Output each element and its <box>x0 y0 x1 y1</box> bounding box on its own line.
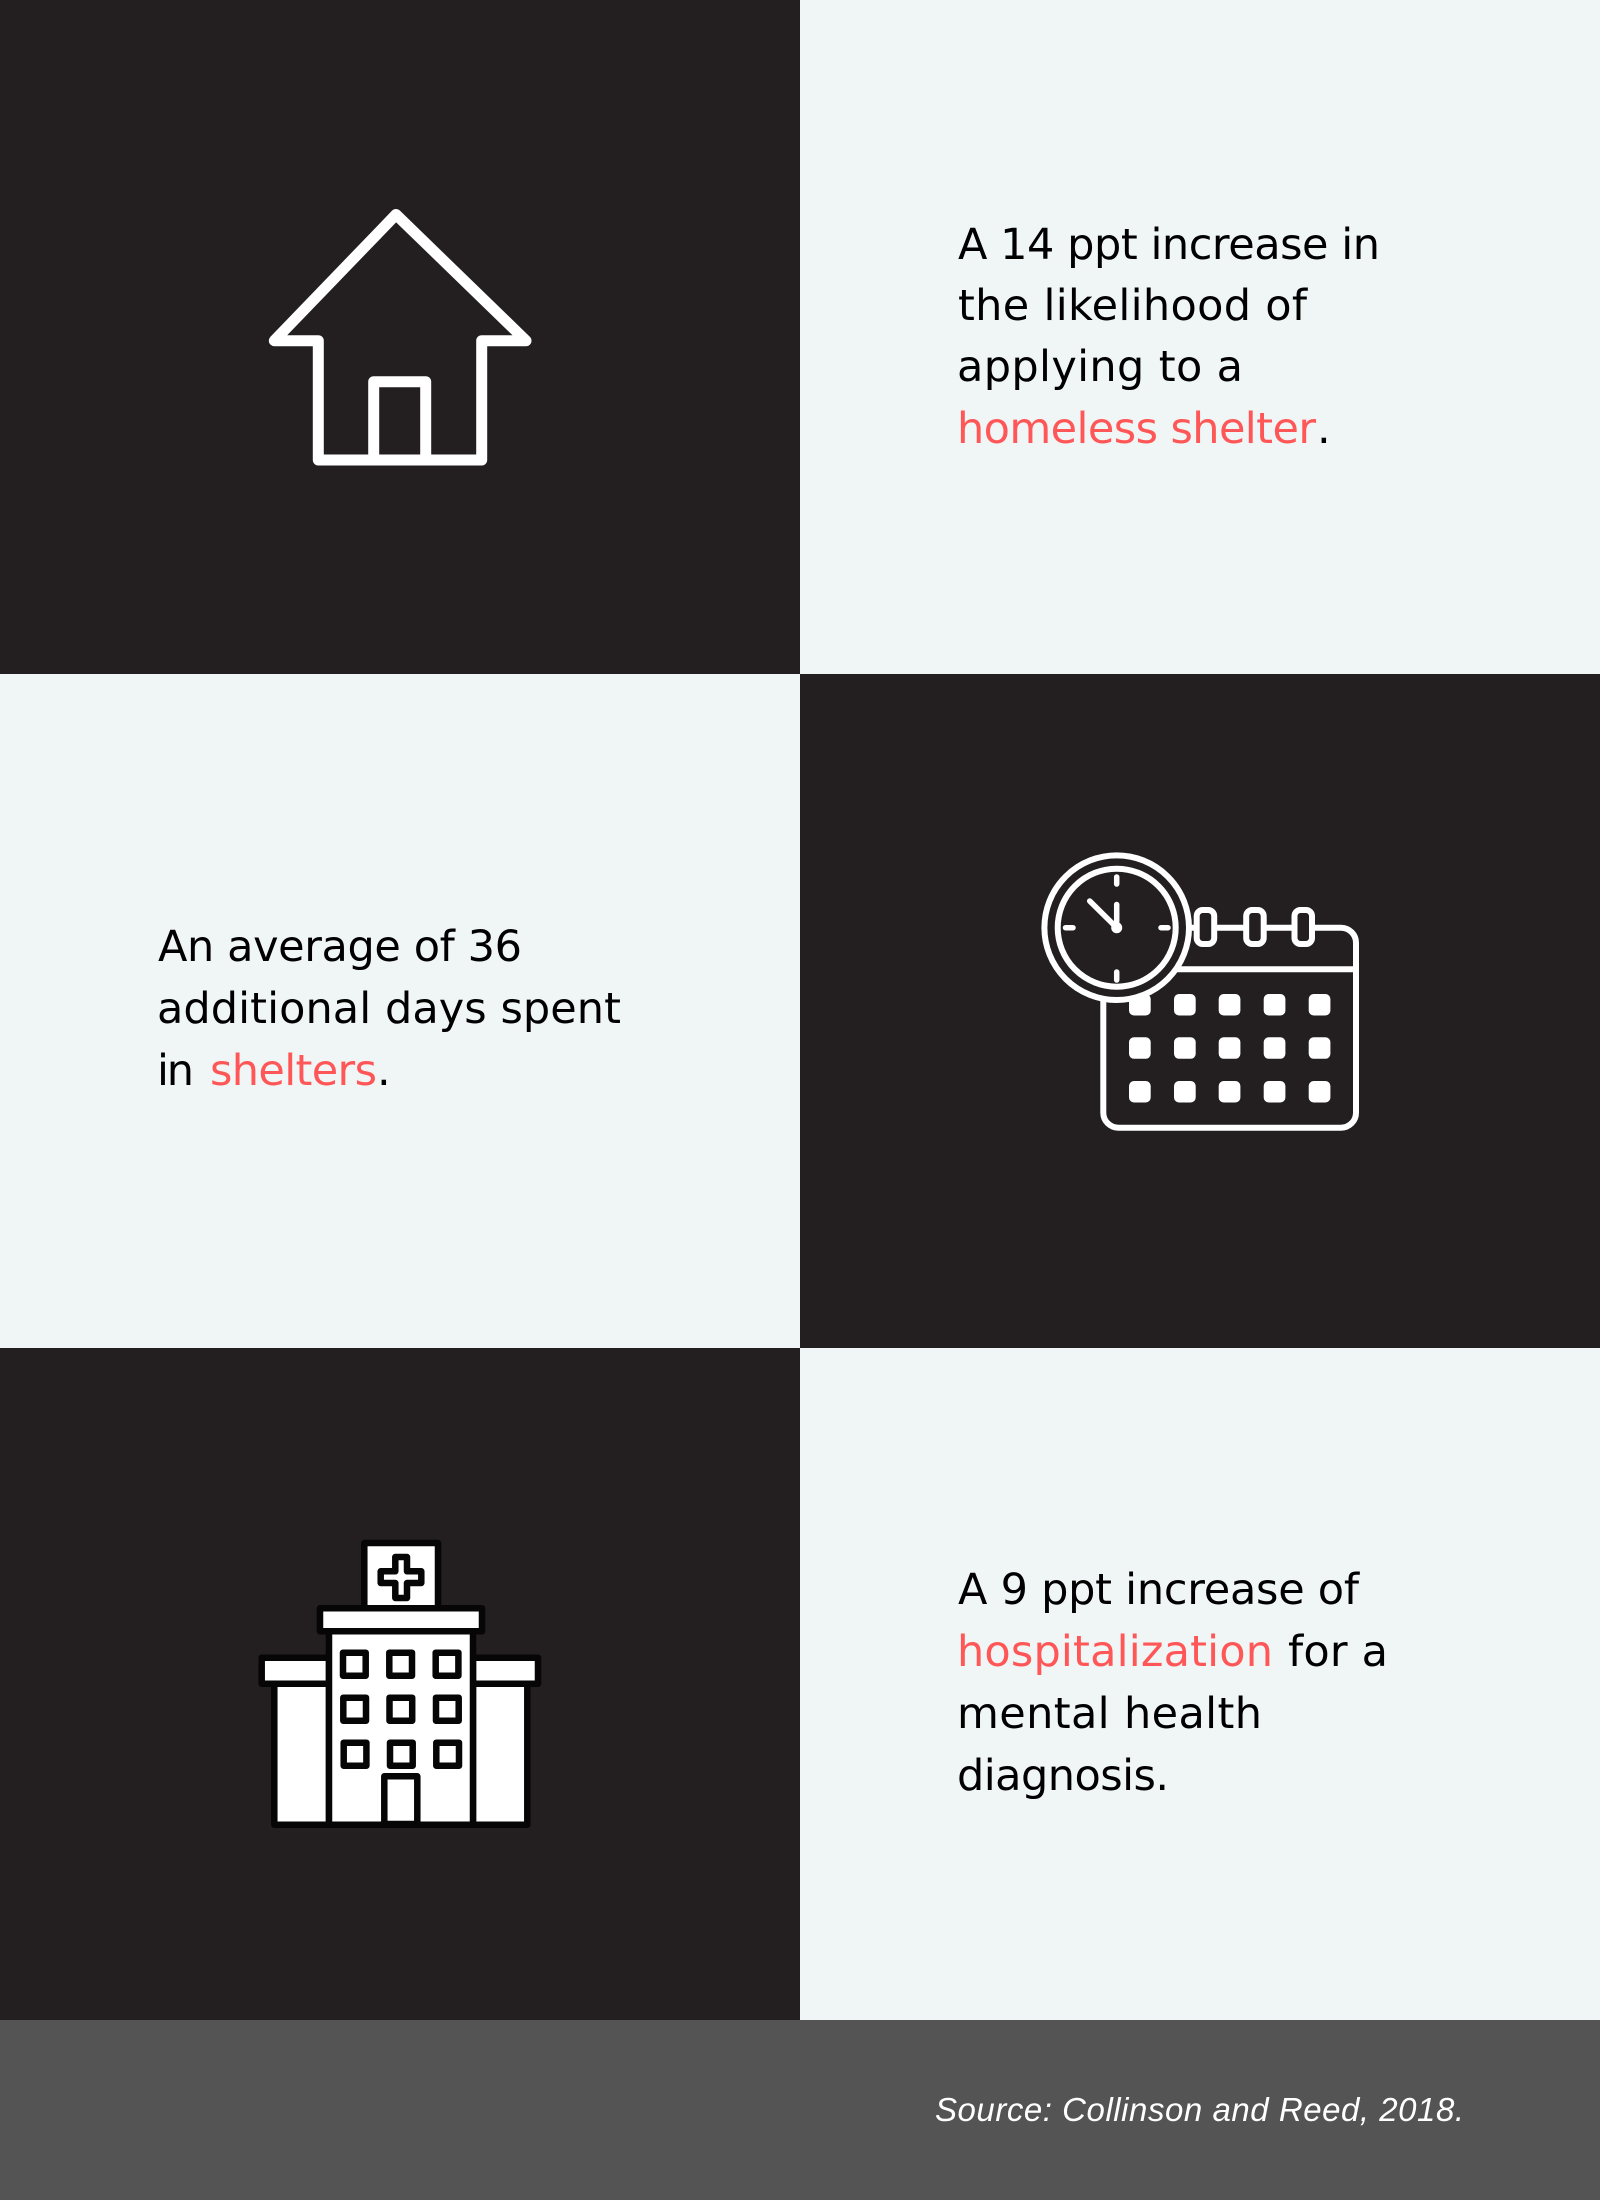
text: homeless shelter statistic <box>957 220 1380 454</box>
main tower <box>329 1631 473 1825</box>
text: homeless shelter statistic: . <box>1317 404 1331 454</box>
panel: hospital icon tile <box>0 1348 800 2020</box>
calendar rings <box>1197 910 1312 944</box>
text: hospitalization statistic: mental health <box>957 1689 1262 1739</box>
medical cross <box>381 1557 421 1598</box>
source note: Source: Collinson and Reed, 2018. <box>935 2091 1464 2128</box>
windows <box>343 1653 366 1676</box>
text: hospitalization statistic <box>957 1565 1388 1801</box>
text: shelter days statistic: in <box>157 1046 194 1096</box>
calendar body <box>1100 928 1356 1128</box>
left wing <box>274 1684 329 1825</box>
text: shelter days statistic: additional days spent <box>157 984 621 1034</box>
panel: house icon tile <box>0 0 800 674</box>
text: shelter days statistic <box>157 922 621 1096</box>
roof slab <box>320 1608 482 1631</box>
text: shelter days statistic: shelters <box>210 1046 377 1096</box>
panel: shelter days statistic <box>0 674 800 1348</box>
panel: hospitalization statistic <box>800 1348 1600 2020</box>
footer band <box>0 2020 1600 2200</box>
right wing <box>473 1684 527 1825</box>
icon: house <box>274 214 526 460</box>
text: hospitalization statistic: hospitalization <box>957 1627 1273 1677</box>
clock <box>1044 855 1189 1000</box>
calendar day squares <box>1129 994 1330 1102</box>
text: homeless shelter statistic: A 14 ppt increase in <box>958 220 1380 270</box>
text: shelter days statistic: . <box>377 1046 391 1096</box>
text: hospitalization statistic: A 9 ppt increase of <box>958 1565 1360 1615</box>
icon: calendar with clock <box>1044 855 1356 1128</box>
panel: calendar icon tile <box>800 674 1600 1348</box>
door <box>384 1776 417 1824</box>
text: homeless shelter statistic: the likelihood of <box>958 281 1308 331</box>
text: hospitalization statistic: for a <box>1288 1627 1388 1677</box>
icon: hospital <box>262 1543 538 1825</box>
text: hospitalization statistic: diagnosis. <box>957 1751 1169 1801</box>
text: homeless shelter statistic: applying to a <box>957 342 1243 392</box>
text: homeless shelter statistic: homeless shelter <box>957 404 1316 454</box>
text: shelter days statistic: An average of 36 <box>158 922 522 972</box>
sign box <box>364 1543 438 1608</box>
panel: homeless shelter statistic <box>800 0 1600 674</box>
